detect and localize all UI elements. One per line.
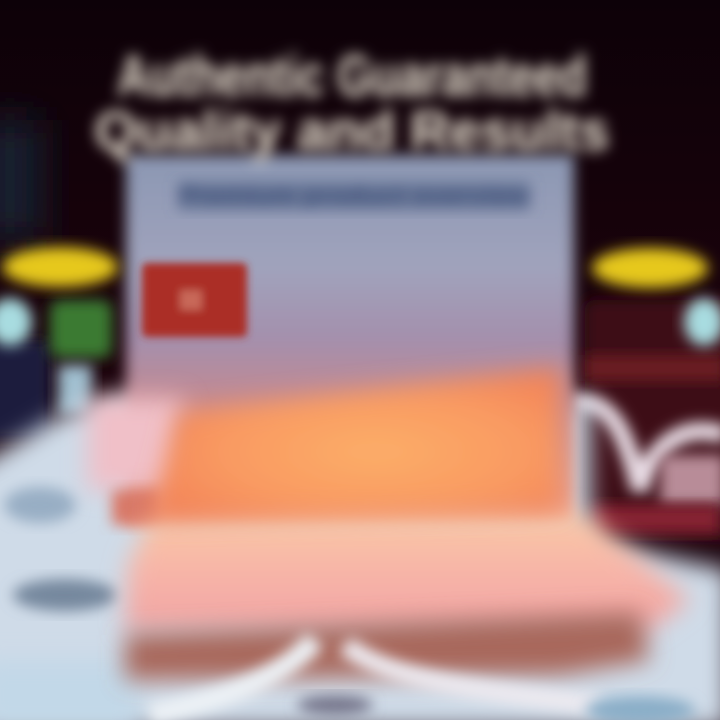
icon: red badge: [142, 263, 247, 337]
left scenery: bottle and liquid: [0, 120, 112, 440]
subtitle text bar: Premium product overview: [179, 180, 530, 210]
panel: board: [126, 155, 574, 525]
red patch under pink: [112, 490, 160, 525]
panel: glowing orange card: [150, 368, 560, 520]
icon: right yellow cap: [592, 248, 708, 288]
bottom white swooshes: [150, 640, 695, 720]
title: Authentic Guaranteed: [117, 44, 587, 109]
icon: left yellow cap: [2, 247, 118, 287]
title: [94, 44, 610, 162]
title: Quality and Results: [94, 99, 610, 162]
slab front edge: [125, 612, 650, 680]
bottom pale surface: [0, 395, 720, 720]
pink patch beside card: [88, 398, 183, 490]
right scenery: dark bottle: [570, 298, 720, 540]
panel: lower slab: [125, 515, 690, 680]
